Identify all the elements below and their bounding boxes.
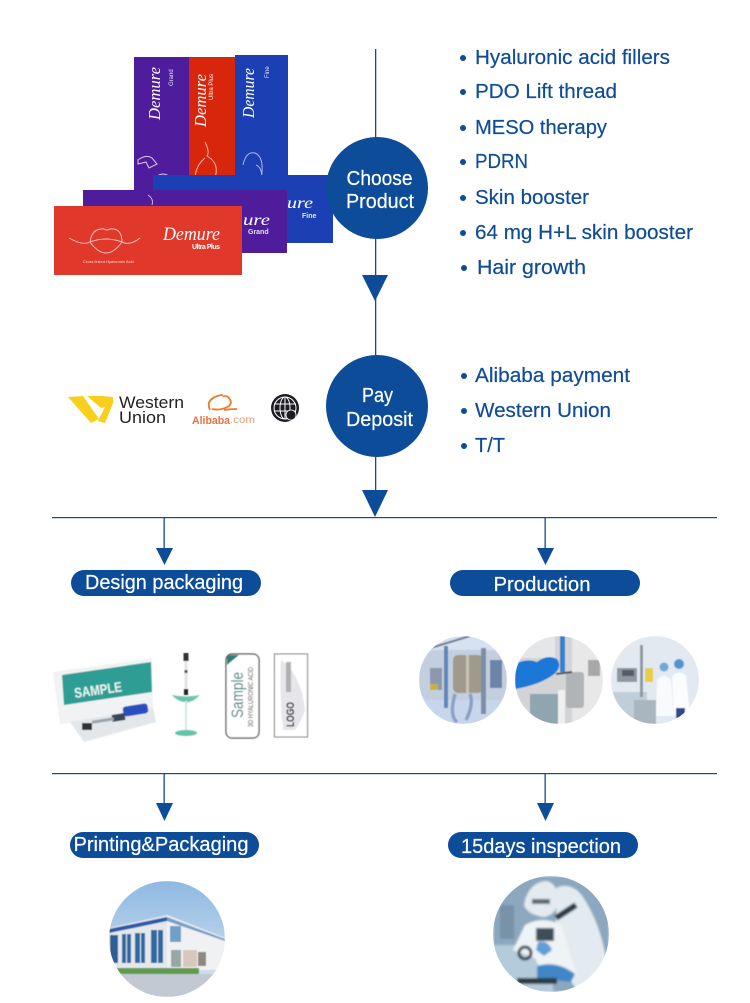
- logo: Alibaba: .com: [230, 415, 255, 426]
- product photo: Demure boxes: [54, 55, 333, 275]
- pill: Production: Production: [494, 574, 590, 596]
- pill: Production: [450, 570, 640, 596]
- icon: globe with dollar: [271, 394, 299, 422]
- product photo: Demure boxes: Ultra Plus: [209, 74, 215, 100]
- sample box with syringe tray: [53, 658, 156, 742]
- pill: Design packaging: Design packaging: [85, 572, 243, 594]
- list: product types: PDRN: [475, 151, 528, 173]
- list: payment methods: Western Union: [475, 400, 611, 422]
- arrow: to production: [537, 518, 554, 565]
- list: product types: Hair growth: [477, 257, 586, 279]
- product photo: Demure boxes: Demure: [145, 67, 164, 121]
- product photo: Demure boxes: Grand: [169, 69, 175, 86]
- sample box with syringe tray: SAMPLE: [73, 678, 123, 701]
- logo label card: LOGO: [285, 702, 297, 727]
- divider branch 1: [52, 517, 717, 518]
- sample label card: 3D HYALURONIC ACID: [248, 667, 255, 727]
- logo label card: [274, 654, 308, 737]
- logo: Western Union: [68, 393, 184, 427]
- product photo: Demure boxes: Fine: [302, 213, 316, 220]
- product photo: Demure boxes: Demure: [162, 224, 220, 245]
- photo: inspection lab: [493, 876, 609, 992]
- arrow: to design packaging: [156, 518, 173, 565]
- sample label card: [226, 654, 259, 738]
- list: product types: Hyaluronic acid fillers: [475, 47, 670, 69]
- list: payment methods: Alibaba payment: [475, 365, 630, 387]
- pill: Printing&Packaging: Printing&Packaging: [74, 834, 248, 856]
- pill: 15days inspection: 15days inspection: [461, 836, 621, 858]
- product photo: Demure boxes: ure: [287, 195, 313, 212]
- flow connector: top vertical line: [375, 49, 376, 490]
- product photo: Demure boxes: Grand: [248, 229, 269, 236]
- arrow: choose to pay: [362, 275, 388, 301]
- logo: Western Union: Western: [119, 393, 184, 412]
- circle: Pay Deposit: Pay: [362, 385, 393, 407]
- product photo: Demure boxes: Ultra Plus: [192, 244, 220, 251]
- payment logos: [68, 393, 299, 427]
- packaging samples: [53, 653, 308, 742]
- product photo: Demure boxes: Fine: [265, 66, 271, 78]
- list: product types: 64 mg H+L skin booster: [475, 222, 693, 244]
- product photo: Demure boxes: Demure: [191, 74, 210, 128]
- circle: Choose Product: Choose: [346, 168, 412, 190]
- list: product types: PDO Lift thread: [475, 81, 617, 103]
- product photo: Demure boxes: Cross linked Hyaluronic Acid: [83, 259, 134, 264]
- list: product types: MESO therapy: [475, 117, 607, 139]
- circle: Choose Product: Product: [346, 191, 414, 213]
- circle: Pay Deposit: [326, 355, 428, 457]
- photo: factory building: [109, 881, 225, 997]
- syringe: [172, 653, 200, 736]
- list: payment methods: [461, 365, 630, 457]
- photo: gloved hand at machine: [515, 636, 603, 724]
- list: product types: Skin booster: [475, 187, 589, 209]
- logo: Alibaba: Alibaba: [192, 415, 231, 427]
- arrow: to printing: [156, 774, 173, 821]
- arrow: pay to split: [362, 490, 388, 517]
- photo: cleanroom staff: [611, 636, 699, 724]
- list: payment methods: T/T: [475, 435, 505, 457]
- product photo: Demure boxes: ure: [243, 212, 270, 229]
- photo: factory equipment: [419, 636, 507, 724]
- divider branch 2: [52, 773, 717, 774]
- list: product types: [460, 47, 693, 279]
- arrow: to inspection: [537, 774, 554, 821]
- circle: Choose Product: [326, 137, 428, 239]
- product photo: Demure boxes: Demure: [239, 68, 258, 119]
- sample label card: Sample: [228, 672, 247, 718]
- logo: Western Union: Union: [119, 408, 166, 427]
- circle: Pay Deposit: Deposit: [346, 409, 413, 431]
- logo: Alibaba: [192, 395, 255, 427]
